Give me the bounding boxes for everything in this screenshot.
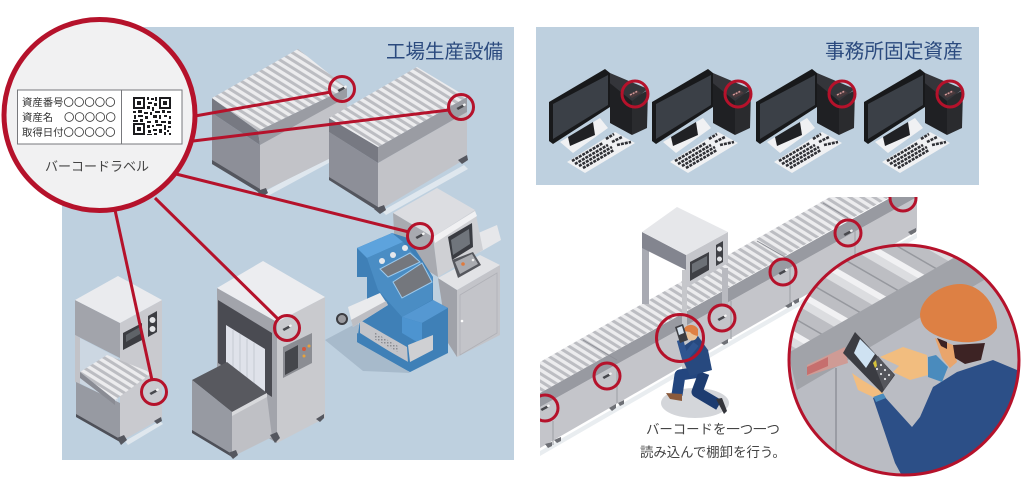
label caption: バーコードラベル [45, 159, 149, 174]
target markers: conveyor barcodes [532, 185, 916, 421]
enlarged rollers [792, 246, 954, 348]
computer set 4 [864, 69, 963, 173]
computer set 3 [756, 69, 855, 173]
target markers: factory barcodes [142, 76, 474, 404]
floor shadow [325, 323, 410, 373]
label text: 資産番号〇〇〇〇〇 [22, 96, 116, 109]
windows [380, 253, 420, 277]
arm [680, 340, 696, 358]
computer set 2 [652, 69, 751, 173]
caption: scan barcodes one by one: バーコードを一つ一つ [646, 422, 780, 437]
red scan beam and label [807, 347, 848, 376]
heading: factory equipment: 工場生産設備 [386, 41, 503, 63]
label text [22, 96, 116, 139]
hat and face [686, 330, 698, 340]
machine: small roller cabinet [75, 276, 163, 445]
illustration: kneeling worker scanning [656, 314, 729, 418]
upper housing [393, 188, 475, 237]
QR code [133, 97, 171, 135]
vent base [360, 320, 408, 363]
touch panel [448, 223, 473, 260]
panel: factory equipment background [62, 27, 514, 460]
label text: 〇〇〇〇〇 [64, 112, 116, 124]
label text: 資産名 [22, 113, 53, 124]
enlarged rail [790, 258, 984, 390]
conveyor unit 2 [329, 67, 468, 215]
callout: worker close-up magnifier [788, 244, 1020, 476]
callout: barcode label magnifier [4, 20, 195, 210]
stepped block [402, 300, 448, 323]
machine: tall chamber with loading table [192, 261, 325, 459]
grey cabinet [438, 278, 457, 357]
legs [677, 372, 700, 395]
label text: 取得日付〇〇〇〇〇 [22, 126, 116, 139]
floor shadow [661, 388, 729, 418]
handheld scanner [675, 324, 688, 343]
machine: blue processing machine [325, 188, 501, 373]
neck and hair [935, 338, 957, 368]
caption: scan barcodes one by one [640, 422, 786, 460]
hard hat [920, 284, 997, 342]
handheld terminal [843, 332, 895, 393]
shoes [666, 393, 682, 401]
illustration: long roller conveyor [540, 183, 917, 456]
heading: office fixed assets: 事務所固定資産 [825, 41, 963, 63]
gauges [379, 245, 408, 264]
conveyor unit 1 [212, 49, 349, 197]
blue body [357, 233, 448, 372]
leader lines [115, 92, 449, 380]
torso [681, 336, 712, 376]
rear cylinder [476, 225, 501, 252]
panel seam [835, 368, 837, 452]
barcode label card [18, 90, 182, 144]
cuff and forearm [928, 355, 948, 382]
worker body [873, 360, 1022, 476]
caption: scan barcodes one by one: 読み込んで棚卸を行う。 [640, 445, 786, 460]
shaft [348, 293, 388, 327]
computer set 1 [549, 69, 648, 173]
panel: office fixed assets background [536, 27, 979, 185]
pointing hand [880, 347, 928, 380]
illustration: control box over conveyor [642, 207, 728, 370]
holding hand [852, 373, 884, 397]
door handle [461, 320, 463, 322]
